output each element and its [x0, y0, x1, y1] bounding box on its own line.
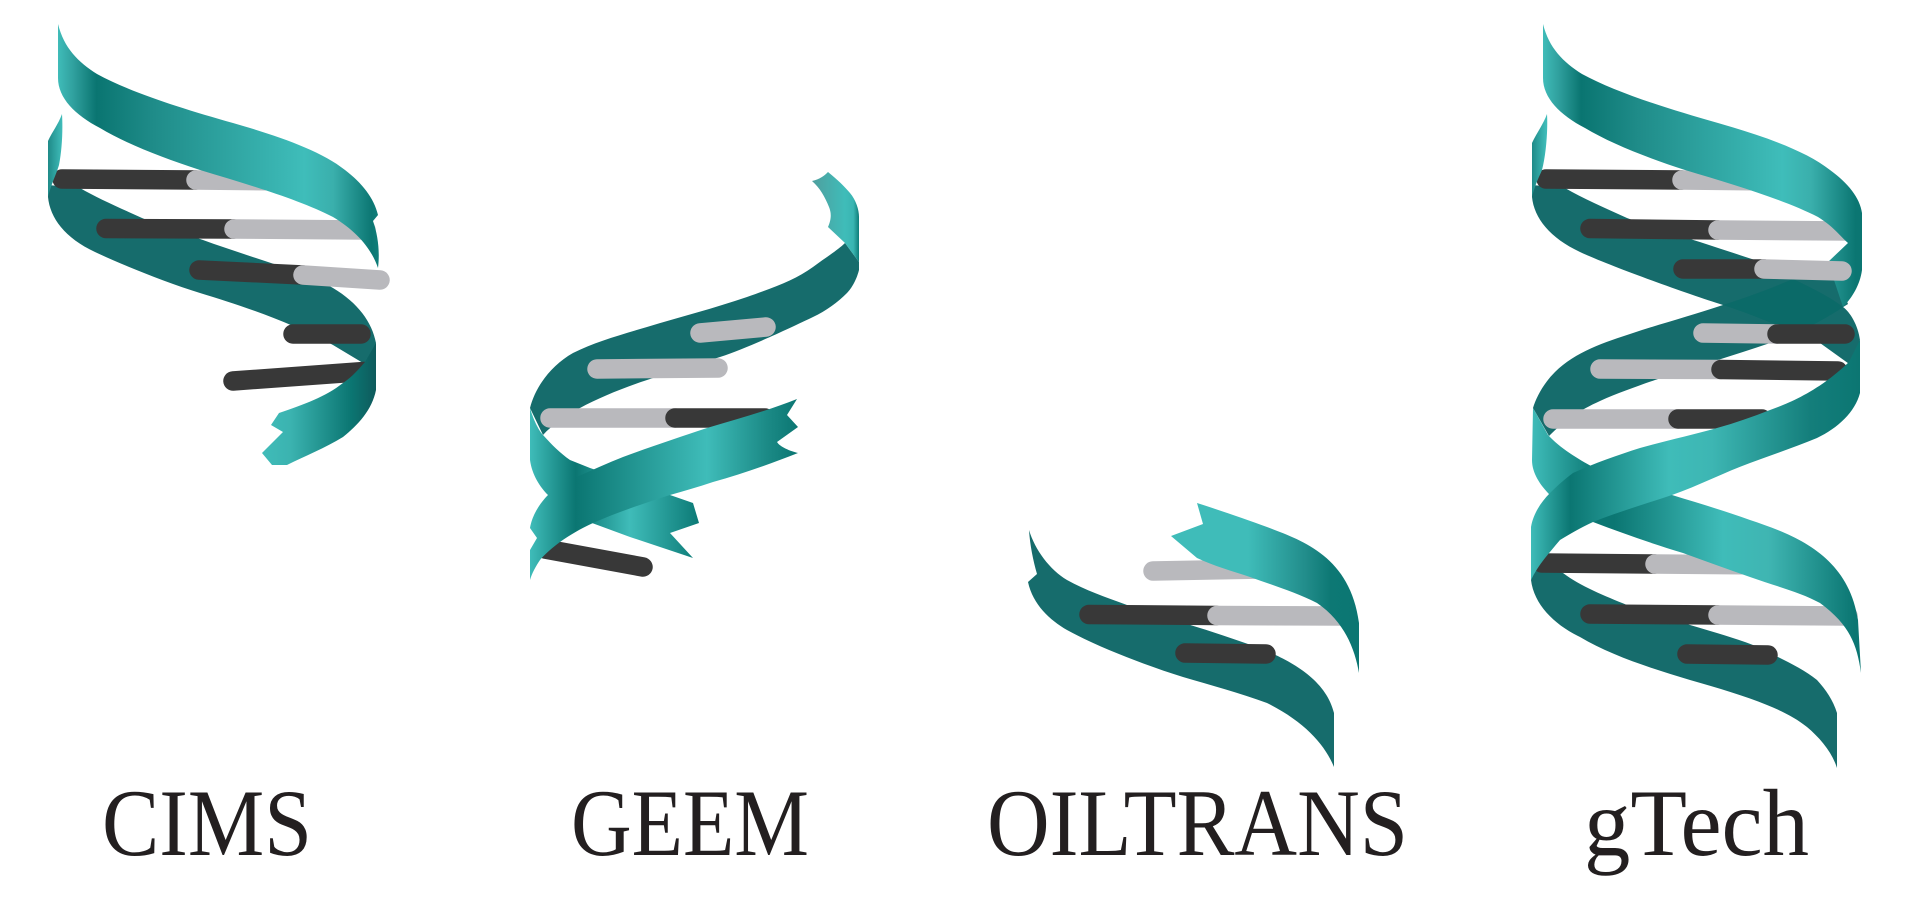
GEEM base pair bars [545, 327, 766, 567]
GEEM rear lower ribbon [530, 408, 699, 558]
CIMS base pair bars [62, 179, 380, 381]
gTech front crossing ribbon [1531, 340, 1860, 580]
panel: OILTRANS [987, 503, 1408, 876]
OILTRANS light ribbon [1171, 503, 1359, 673]
gTech top light ribbon [1543, 24, 1862, 307]
CIMS back dark strand [48, 185, 376, 366]
CIMS small left strip [48, 114, 62, 197]
GEEM top right ribbon end [812, 172, 859, 262]
gTech lower dark strand [1531, 565, 1837, 768]
gTech small left strip [1532, 114, 1547, 197]
panel: GEEM [530, 172, 859, 876]
gTech label: gTech [1584, 770, 1809, 876]
CIMS lower ribbon tail [262, 343, 376, 465]
GEEM label: GEEM [571, 770, 809, 876]
gTech upper and lower bars behind ribbons [1542, 179, 1851, 655]
gTech top bars over ribbon [1683, 269, 1845, 334]
OILTRANS label: OILTRANS [987, 770, 1408, 876]
GEEM dark strand [530, 243, 859, 435]
gTech crossing dark strand [1533, 262, 1848, 436]
GEEM front ribbon [530, 399, 798, 580]
gTech strand overlap [1723, 279, 1843, 333]
panel: gTech [1531, 24, 1862, 876]
CIMS front light ribbon [58, 24, 379, 268]
CIMS label: CIMS [102, 770, 312, 876]
gTech left bend and lower right ribbon [1532, 408, 1861, 673]
gTech middle bars behind front ribbon [1553, 369, 1838, 419]
gTech upper dark strand [1532, 185, 1860, 366]
OILTRANS dark strand [1028, 530, 1334, 767]
panel: CIMS [48, 24, 380, 876]
OILTRANS base pair bars [1089, 569, 1346, 654]
